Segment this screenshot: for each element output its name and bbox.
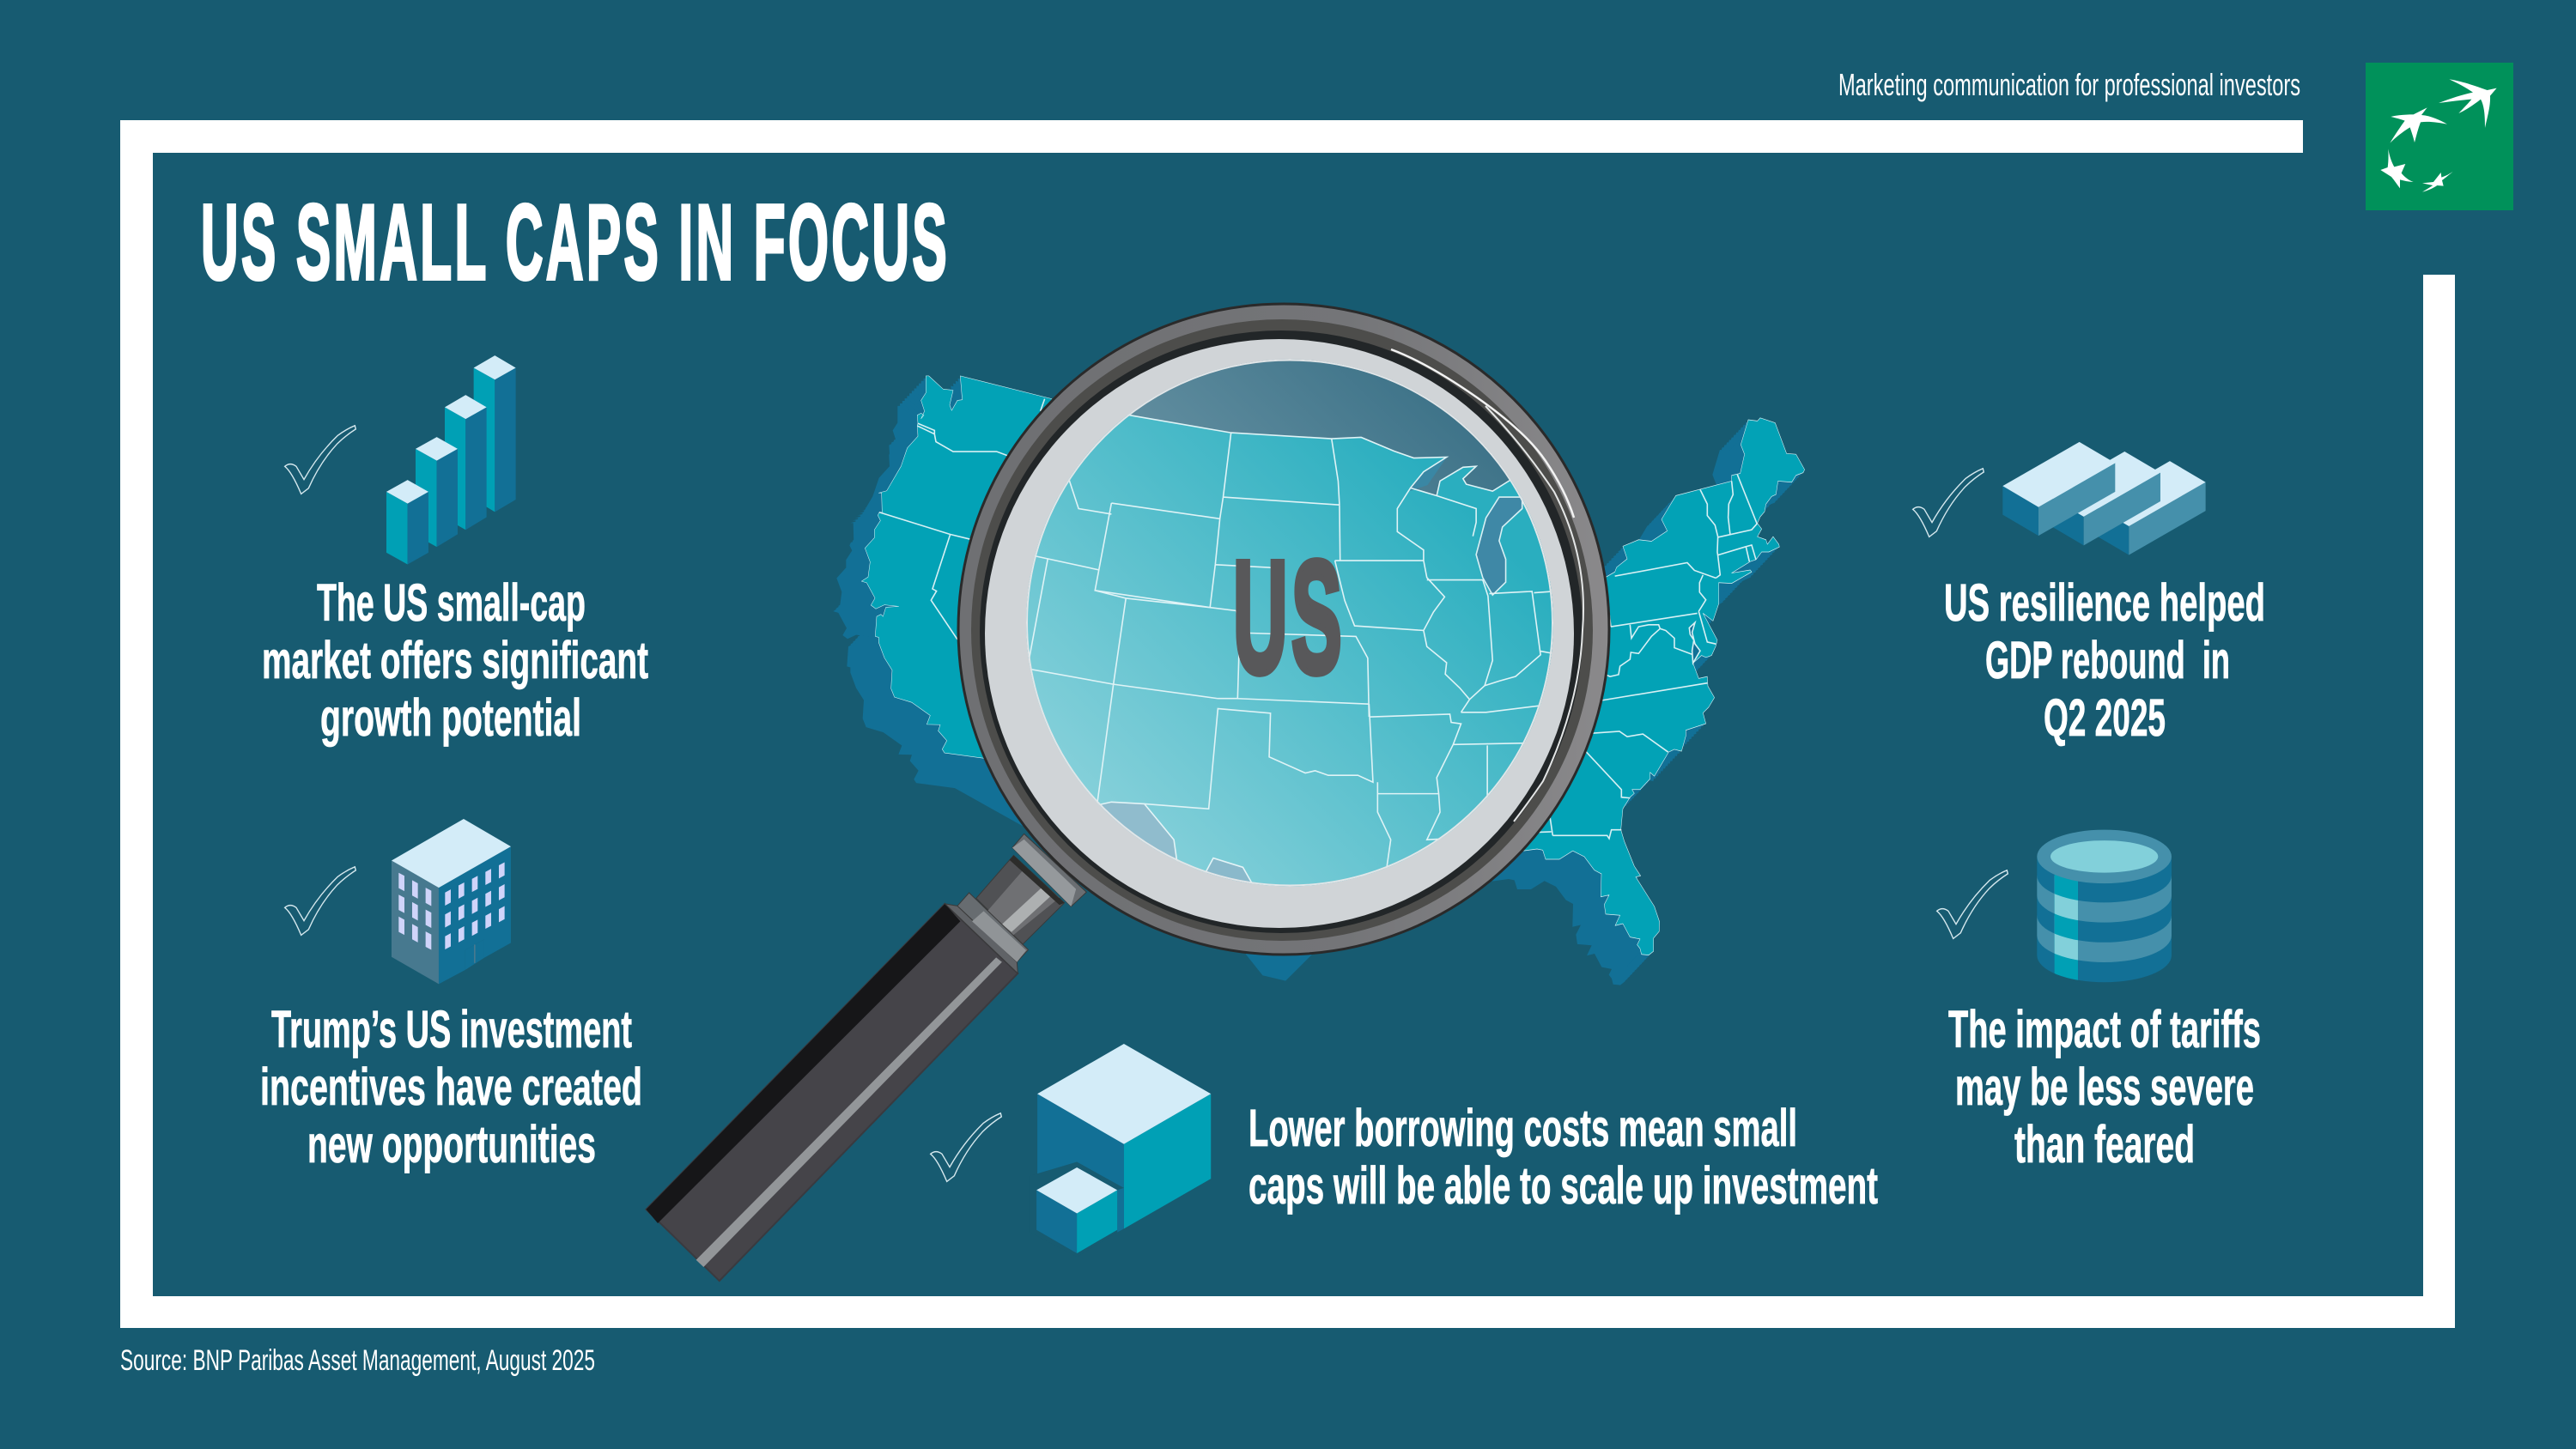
- magnifying glass handle: [646, 834, 1086, 1281]
- map: United States with extruded shadow: [833, 376, 1805, 985]
- panel: tariffs: [1937, 830, 2261, 1173]
- text: [260, 1000, 642, 1173]
- check mark: [285, 867, 355, 935]
- text: Lower borrowing costs mean small: [1249, 1099, 1797, 1157]
- text: than feared: [2014, 1115, 2195, 1173]
- lens glass with enlarged map: [1026, 359, 1553, 886]
- text: caps will be able to scale up investment: [1249, 1156, 1878, 1215]
- lens rim: [958, 304, 1609, 955]
- text: The impact of tariffs: [1948, 1000, 2261, 1058]
- check mark: [285, 426, 355, 494]
- panel: small-cap growth potential: [262, 355, 648, 747]
- map shadow: [833, 379, 1802, 985]
- frame: white border: [120, 120, 2455, 1328]
- text: incentives have created: [260, 1058, 642, 1116]
- text: Q2 2025: [2044, 688, 2166, 747]
- icon: big and small cubes: [1030, 1044, 1211, 1257]
- lens inner edge highlight: [1027, 361, 1552, 886]
- check mark: [1937, 870, 2008, 938]
- text: [1948, 1000, 2261, 1173]
- map state borders: [879, 399, 1758, 839]
- text: GDP rebound in: [1985, 631, 2230, 689]
- icon: stacked ingots: [2002, 442, 2206, 555]
- logo: BNP Paribas green square with stars: [2366, 63, 2513, 210]
- text: new opportunities: [307, 1115, 596, 1173]
- magnifying glass lens: [958, 304, 1670, 955]
- icon: rising bars: [386, 355, 516, 565]
- disclaimer: marketing communication: Marketing communication for professional investors: [1838, 67, 2300, 102]
- source note: Source: BNP Paribas Asset Management, August 2025: [120, 1344, 595, 1377]
- map land: [861, 376, 1805, 955]
- panel: borrowing costs: [931, 1044, 1878, 1257]
- check mark: [931, 1113, 1001, 1181]
- icon: coin stack: [2037, 830, 2172, 982]
- text: growth potential: [320, 688, 581, 747]
- text: US resilience helped: [1944, 573, 2265, 632]
- text: may be less severe: [1955, 1058, 2254, 1116]
- panel: investment incentives: [260, 819, 642, 1173]
- magnifying glass lens: US: [1233, 529, 1346, 706]
- icon: office building: [392, 819, 511, 984]
- text: [1944, 573, 2265, 747]
- text: US SMALL CAPS IN FOCUS: [201, 184, 950, 302]
- text: market offers significant: [262, 631, 648, 689]
- text: Trump’s US investment: [271, 1000, 632, 1058]
- text: [262, 573, 648, 747]
- panel: GDP rebound: [1913, 442, 2265, 747]
- text: [1249, 1099, 1878, 1215]
- check mark: [1913, 469, 1984, 537]
- text: The US small-cap: [317, 573, 586, 632]
